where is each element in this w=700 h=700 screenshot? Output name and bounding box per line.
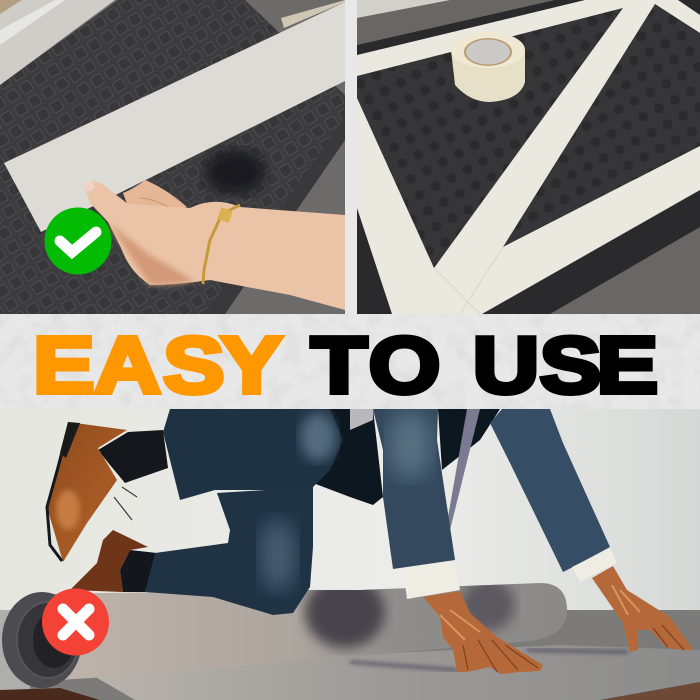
banner background (0, 314, 700, 409)
title: EASY TO USE (33, 321, 658, 410)
wood floor left (0, 688, 100, 700)
right hand (592, 566, 693, 652)
thumbnail (84, 181, 94, 191)
gold bracelet (203, 205, 240, 284)
back shoe and sock (70, 530, 157, 592)
hand and arm (84, 181, 345, 310)
floor left pale (0, 610, 30, 690)
rug on floor (80, 645, 700, 700)
icon: green check badge (44, 208, 112, 274)
carpet floor (0, 0, 345, 314)
hand shadows on rug (350, 650, 628, 670)
dark stain on mat (205, 150, 265, 194)
rolled rug (2, 576, 567, 688)
strip of tape (4, 2, 345, 232)
upper leg (163, 409, 343, 500)
raised shoe and sock (47, 422, 168, 562)
carpet floor (357, 0, 700, 314)
wood floor right (600, 682, 700, 700)
door mat (0, 0, 345, 314)
tie (448, 409, 480, 530)
lower leg and knee (145, 487, 313, 615)
floor (0, 610, 700, 700)
right sleeve (490, 409, 610, 572)
icon: red cross badge (42, 588, 109, 656)
door frame strip (357, 0, 450, 18)
hand shading (108, 222, 195, 285)
door mat (357, 0, 700, 314)
mat panel right (503, 4, 700, 247)
banner texture (0, 314, 700, 409)
jacket back (310, 409, 500, 505)
right shirt cuff (572, 548, 617, 582)
panel: mat covered with tape strips and roll (357, 0, 700, 314)
left hand (423, 591, 543, 674)
shirt (350, 409, 373, 430)
mat border (205, 118, 345, 314)
title: EASY TO USE: TO USE (311, 321, 658, 410)
roll edge behind tape (281, 0, 345, 28)
wall (568, 409, 700, 610)
panel: correct use, hand applying tape to mat (0, 0, 345, 314)
tape roll (451, 32, 525, 102)
mat panel left (357, 8, 623, 268)
fingers behind thumb (123, 180, 187, 208)
left shirt cuff (406, 586, 460, 599)
left sleeve (373, 409, 455, 569)
door frame (0, 0, 115, 85)
panel: wrong way, man rolling out a carpet (0, 409, 700, 700)
tape strips (357, 0, 700, 314)
title: EASY TO USE: EASY (33, 321, 282, 410)
tape seams (434, 247, 503, 314)
